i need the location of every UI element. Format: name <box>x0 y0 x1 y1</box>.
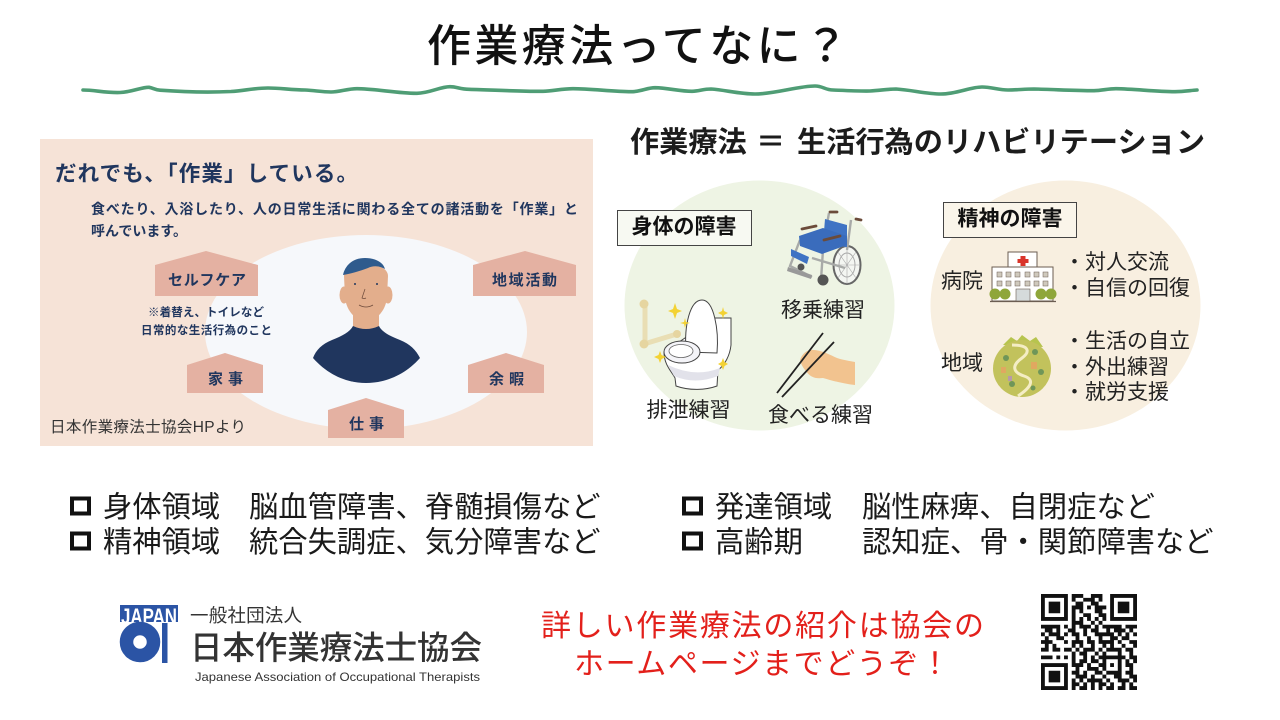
panel description <box>91 201 578 239</box>
red call to action: ホームページまでどうぞ！ <box>574 648 950 681</box>
physical domain row: 身体領域 <box>103 491 220 524</box>
person illustration <box>313 258 420 383</box>
self care note: ※着替え、トイレなど <box>148 305 264 319</box>
community goals list: ・生活の自立 <box>1064 330 1190 353</box>
red call to action: 詳しい作業療法の紹介は協会の <box>541 610 984 643</box>
source note: 日本作業療法士協会HPより <box>50 418 246 436</box>
mental domain row: 統合失調症、気分障害など <box>249 526 601 559</box>
icon: community globe <box>993 335 1051 397</box>
house label: self care: セルフケア <box>168 272 246 289</box>
section heading: ＝ <box>756 127 785 159</box>
domain list: left column <box>72 491 601 559</box>
association logo: Japanese Association of Occupational Therapists <box>195 670 480 684</box>
toileting practice label: 排泄練習 <box>646 399 730 422</box>
checkbox <box>72 534 89 548</box>
developmental domain row: 脳性麻痺、自閉症など <box>862 491 1155 524</box>
elderly domain row: 高齢期 <box>715 526 803 559</box>
community goals list <box>1064 330 1190 404</box>
elderly domain row: 認知症、骨・関節障害など <box>862 526 1214 559</box>
mental disability label: 精神の障害 <box>958 208 1062 230</box>
self care note: 日常的な生活行為のこと <box>141 323 272 337</box>
icon: hand holding chopsticks <box>777 333 855 397</box>
wavy green title underline <box>83 86 1197 94</box>
hospital goals list: ・自信の回復 <box>1064 277 1190 300</box>
panel: physical disability <box>618 180 894 430</box>
icon: clean toilet with handrail <box>640 300 731 389</box>
mental disability label <box>944 202 1076 238</box>
pale ellipse behind figure <box>205 235 527 429</box>
house label: housework: 家事 <box>208 370 243 388</box>
icon: wheelchair <box>787 212 861 286</box>
logo mark: JAPAN <box>121 604 177 629</box>
house label: self care <box>155 251 258 296</box>
section heading: 作業療法 <box>630 126 747 159</box>
house label: community activity <box>473 251 576 296</box>
checkbox <box>684 534 701 548</box>
physical disability label <box>618 210 752 246</box>
community goals list: ・外出練習 <box>1064 356 1169 379</box>
house label: leisure <box>468 353 544 393</box>
checkbox <box>684 498 701 514</box>
association logo: 日本作業療法士協会 <box>190 630 482 666</box>
house label: work: 仕事 <box>349 415 384 433</box>
panel description: 呼んでいます。 <box>91 223 187 239</box>
association logo <box>120 604 482 684</box>
panel heading: だれでも、「作業」している。 <box>55 162 358 186</box>
title: 作業療法ってなに？ <box>427 22 848 71</box>
section heading: 生活行為のリハビリテーション <box>797 126 1205 159</box>
association name: 一般社団法人 <box>190 605 302 626</box>
physical domain row: 脳血管障害、脊髄損傷など <box>249 491 601 524</box>
red call to action <box>541 610 984 681</box>
community goals list: ・就労支援 <box>1064 381 1169 404</box>
house label: housework <box>187 353 263 393</box>
house label: leisure: 余暇 <box>489 371 524 388</box>
physical disability label: 身体の障害 <box>632 216 736 238</box>
hospital goals list: ・対人交流 <box>1064 251 1169 274</box>
mental domain row: 精神領域 <box>103 526 220 559</box>
house label: work <box>328 398 404 438</box>
panel: everyone does occupation <box>40 139 593 446</box>
domain list: right column <box>684 491 1214 559</box>
panel: mental disability <box>930 180 1200 430</box>
developmental domain row: 発達領域 <box>715 491 832 524</box>
checkbox <box>72 498 89 514</box>
house label: community activity: 地域活動 <box>492 272 557 289</box>
self care note <box>141 305 272 337</box>
QR code <box>1041 596 1137 688</box>
transfer practice label: 移乗練習 <box>781 299 865 322</box>
icon: hospital <box>990 252 1056 302</box>
eating practice label: 食べる練習 <box>768 404 873 427</box>
logo mark <box>120 604 178 663</box>
community label: 地域 <box>941 352 983 375</box>
hospital label: 病院 <box>941 270 983 293</box>
panel description: 食べたり、入浴したり、人の日常生活に関わる全ての諸活動を「作業」と <box>91 201 578 217</box>
hospital goals list <box>1064 251 1190 300</box>
